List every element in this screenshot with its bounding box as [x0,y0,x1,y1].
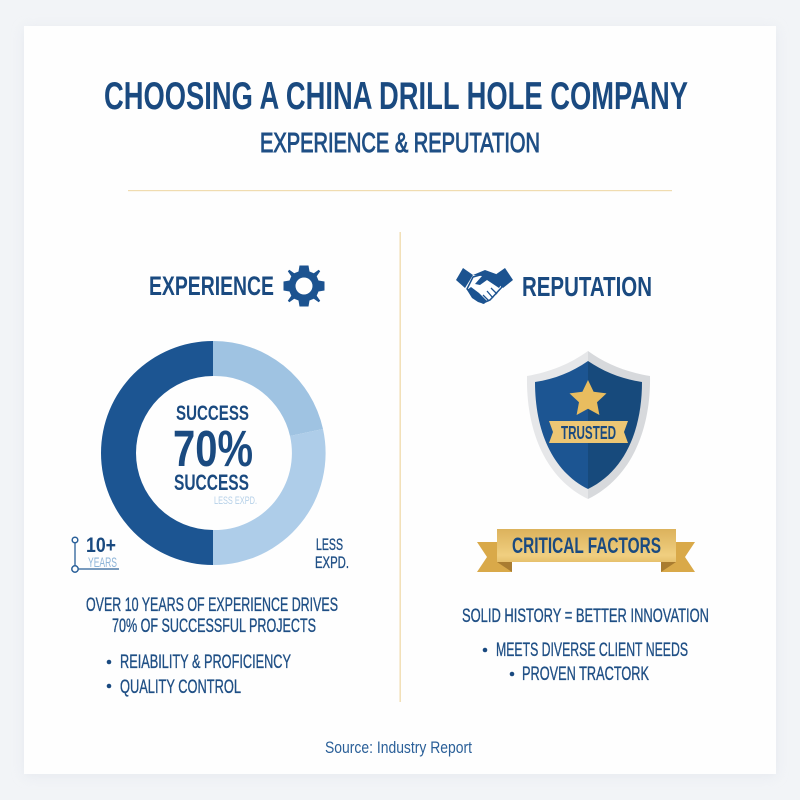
panel: experience [72,266,349,698]
list: experience bullets [107,652,291,698]
donut chart [101,341,326,565]
callout: less experienced [315,535,349,572]
subtitle: EXPERIENCE & REPUTATION [260,127,540,158]
list: reputation bullets: MEETS DIVERSE CLIENT NEEDS [496,640,688,661]
text: experience summary [86,595,338,637]
icon: trusted shield: TRUSTED [561,423,616,443]
icon: gear [284,266,324,306]
heading: experience: EXPERIENCE [149,271,274,301]
source note: Source: Industry Report [325,739,472,757]
text: experience summary: 70% OF SUCCESSFUL PROJECTS [112,616,316,637]
icon: trusted shield [527,351,650,499]
donut centre label: SUCCESS [176,402,249,425]
list: experience bullets: REIABILITY & PROFICIENCY [120,652,291,673]
donut centre label: SUCCESS [174,470,249,495]
callout: 10+ years: YEARS [88,554,117,570]
text: experience summary: OVER 10 YEARS OF EXPERIENCE DRIVES [86,595,338,616]
banner: critical factors [477,529,695,572]
callout: less experienced: LESS [316,535,343,554]
list: reputation bullets: PROVEN TRACTORK [522,664,649,685]
donut centre label: LESS EXPD. [214,495,257,507]
heading: reputation: REPUTATION [522,271,652,302]
donut centre label: 70% [173,420,253,477]
callout: 10+ years [72,534,119,572]
donut centre label [173,402,257,507]
callout: less experienced: EXPD. [315,553,349,572]
list: reputation bullets [483,640,688,685]
callout: 10+ years: 10+ [86,534,116,557]
panel: reputation [456,268,709,685]
icon: handshake [456,268,513,304]
list: experience bullets: QUALITY CONTROL [120,677,241,698]
banner: critical factors: CRITICAL FACTORS [512,533,661,558]
